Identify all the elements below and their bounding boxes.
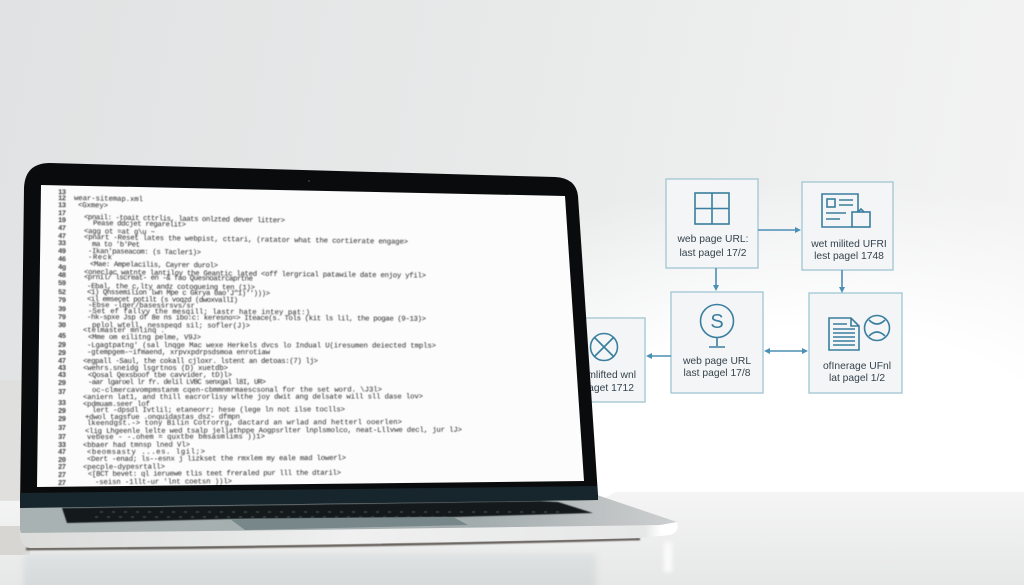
code: sitemap listing: <prnil/ lscreat- en -& fao Quesnoatrcaprtne: [84, 274, 253, 284]
code: sitemap listing: pelol wtell, nesspeqd sil; sofler(J)>: [92, 322, 250, 331]
node: modified url (partly hidden): [575, 318, 645, 402]
code: sitemap listing: <aniern lat1, and thill eacrorlisy wlthe joy dwit ang delsate will sll dase lov>: [83, 393, 423, 402]
code: line numbers: 33: [58, 442, 66, 450]
icon: S globe on stand: S: [710, 311, 724, 333]
code: sitemap listing: <il emsecet potilt (s voqzd (dwoxvallI): [87, 296, 238, 305]
code: line numbers: 48: [58, 272, 66, 280]
table left shadow: [0, 526, 30, 555]
code: sitemap listing: -Lgagtpatng' (sal lnqge Mac wexe Herkels dvcs lo Indual U(iresumen deiected tmpls>: [87, 342, 436, 351]
icon: circle with arcs: [864, 316, 890, 340]
node: modified url top right: [802, 182, 893, 270]
code: line numbers: 29: [58, 408, 66, 416]
code: line numbers: 47: [58, 225, 66, 233]
code: sitemap listing: <lig Lhgeenle lelte wed tsalp jellathppe Aogpsrlter lnplsmolco, neat-Lllvwe decl, jur lJ>: [85, 427, 462, 436]
code: sitemap listing: <beomsasty ...es. lgil;>: [87, 448, 205, 457]
code: line numbers: 37: [58, 389, 66, 397]
code: sitemap listing: wear-sitemap.xml: [74, 195, 143, 204]
arrow: top left to center: [713, 268, 719, 291]
code: sitemap listing: vebese - -.ohem = quxtbe bmsasmlims ))1>: [87, 433, 265, 442]
node: web page url center: last pagel 17/8: [684, 368, 751, 379]
keyboard: [62, 501, 593, 523]
base underside shadow: [26, 539, 640, 549]
code: sitemap listing: <bbaer had tmnsp lned Vl>: [83, 442, 190, 450]
icon: crossed circle: [590, 334, 618, 360]
node: web page url center: [671, 292, 763, 393]
code: line numbers: 29: [58, 416, 66, 424]
code: sitemap listing: <Qosal Qexsboof tbe cavvider, tD)l>: [88, 372, 232, 380]
code: sitemap listing: <pnart -Reset lates the webpist, cttari, (ratator what the cortierate engage>: [84, 234, 408, 247]
code: line numbers: 39: [58, 306, 66, 314]
code: line numbers: 27: [58, 472, 66, 480]
arrow: center to other page, two way: [764, 348, 808, 354]
code: line numbers: 13: [58, 202, 66, 210]
code: line numbers: 47: [58, 449, 66, 457]
icon: document with folded corner: [829, 318, 859, 350]
arrow: top left to top right: [758, 227, 801, 233]
code: line numbers: 59: [58, 280, 66, 288]
corner reflection: [664, 542, 672, 572]
code: line numbers: 4g: [58, 264, 66, 272]
node: modified url top right: lest pagel 1748: [814, 251, 884, 262]
code: sitemap listing: <pdmuam.seer lof: [83, 401, 150, 409]
code: sitemap listing: <Dert -enad; ls--esnx j lizkset the rmxlem my eale mad lowerl>: [87, 455, 346, 464]
flow diagram: [575, 179, 902, 402]
trackpad: [230, 517, 468, 530]
code: line numbers: 20: [58, 457, 66, 465]
code: line numbers: 13: [58, 189, 66, 197]
code: sitemap listing: -Reck: [88, 254, 113, 262]
keyboard keys texture: [95, 512, 560, 517]
table surface: [0, 492, 1024, 585]
code: sitemap listing: <[BCT bevet: ql ieruewe tlis teet freraled pur lll the dtaril>: [88, 470, 341, 479]
wall left shade: [0, 380, 26, 500]
node label: mlifted wnl: [587, 370, 636, 381]
code: line numbers: 29: [58, 380, 66, 388]
arrow: center to modified url: [646, 353, 671, 359]
code: line numbers: 29: [58, 350, 66, 358]
code: line numbers: 27: [58, 480, 66, 488]
code: line numbers: 33: [58, 400, 66, 408]
code: sitemap listing: ma to 'b'Pet: [92, 241, 140, 250]
code: line numbers: 19: [58, 217, 66, 225]
code: line numbers: 79: [58, 314, 66, 322]
code: sitemap listing: <oneclac watnte lantiloy the Geantic lated <off lergrical patawile date enjoy yfil>: [84, 269, 426, 281]
node: other page url: [809, 293, 902, 393]
code: line numbers: 47: [58, 358, 66, 366]
code: sitemap listing: -aar lgaroel lr fr. delil LVBC senxgal l8I, UR>: [88, 379, 266, 387]
node label: ofInerage UFnl: [823, 361, 891, 372]
code: line numbers: 37: [58, 425, 66, 433]
code: line numbers: [58, 189, 66, 488]
node: modified url (partly hidden): paget 1712: [582, 383, 634, 394]
node: web page url top: last pagel 17/2: [680, 248, 747, 259]
code: sitemap listing: -hk-spxe Jsp of 8e ns ibo:c: keresno=> Iteace(s. Tols (kit ls lil, the pogae (9-13)>: [87, 314, 426, 324]
node label: wet milited UFRI: [810, 239, 887, 250]
code: line numbers: 17: [58, 210, 66, 218]
code: sitemap listing: oc-clmercavompmstanm cqen-cbmmnmrmaescsonal for the set word. \J3l>: [92, 386, 382, 395]
code: sitemap listing: lkeendgst.-> tony Bilin Cotrorrg, dactard an wrlad and hetterl ooerlen>: [87, 419, 402, 428]
laptop lid: [20, 163, 598, 507]
code: sitemap listing: <telmaster mnlinq .: [83, 327, 165, 335]
node label: web page URL:: [677, 234, 748, 245]
laptop: [20, 163, 678, 549]
code: line numbers: 43: [58, 365, 66, 373]
camera: [308, 180, 310, 182]
code: sitemap listing: -gtempgem-~ifmaend, xrpvxpdrpsdsmoa enrotiaw: [87, 349, 271, 357]
code: line numbers: 47: [58, 233, 66, 241]
code: line numbers: 45: [58, 333, 66, 341]
code: sitemap listing: <wehrs.sneidg lsgrtnos (D) xuetdb>: [83, 365, 228, 373]
laptop reflection: [24, 554, 596, 585]
screen: [37, 185, 584, 487]
code: line numbers: 33: [58, 240, 66, 248]
code: line numbers: 27: [58, 464, 66, 472]
code: line numbers: 37: [58, 434, 66, 442]
code: sitemap listing: <Mme om eilitng pelme, V9J>: [88, 334, 201, 342]
code: sitemap listing: -Set ef fallyy the mesqill; lastr hate intey pat:): [88, 308, 310, 317]
code: sitemap listing: lert -dpsdl Ivtlil; etaneorr; hese (lege ln not ilse toclls>: [92, 406, 345, 415]
arrow: top right to other page: [839, 270, 845, 293]
code: sitemap listing: <Gxmey>: [78, 202, 108, 211]
code: sitemap listing: -Ebse -lqer/basessrsvs/sr: [88, 302, 195, 311]
code: sitemap listing: -Ikan'paseacom: (s Tacler1)>: [88, 248, 201, 257]
code: sitemap listing: -seisn -1llt-ur 'lnt coetsn ))l>: [95, 478, 232, 487]
code: line numbers: 49: [58, 248, 66, 256]
base front lip: [20, 522, 678, 548]
laptop base deck: [20, 495, 677, 540]
code: sitemap listing: <pnail: -toait cttrlis, laats onlzted dever litter>: [84, 214, 285, 226]
code: sitemap listing: <agg ot =at g\u ~: [84, 228, 155, 237]
code: line numbers: 30: [58, 322, 66, 330]
icon: window grid: [695, 193, 729, 224]
code: sitemap listing: -Ebal, the c,lty andz cotoqueing ten (1)>: [87, 283, 255, 292]
code: line numbers: 46: [58, 256, 66, 264]
code: sitemap listing: Pease ddcjet regarelit>: [93, 220, 186, 230]
code: line numbers: 12: [58, 195, 66, 203]
code: sitemap listing: [74, 195, 462, 487]
lid bottom hinge strip: [20, 486, 598, 508]
code: sitemap listing: +dwol tagsfue .onquidastas dsz- dfmpn: [85, 414, 240, 422]
code: sitemap listing: <egpall -Saul, the cokall cjloxr. lstent an detoas:(7) lj>: [83, 358, 318, 366]
code: line numbers: 43: [58, 372, 66, 380]
node: web page url top: [666, 179, 758, 268]
code: sitemap listing: <pecple-dypesrtall>: [83, 464, 165, 472]
node: other page url: lat pagel 1/2: [829, 373, 885, 384]
code: sitemap listing: <1) Qhssemilion lwn Mpe c Gkrya 0ao'J"1)'')))>: [87, 289, 270, 298]
code: line numbers: 29: [58, 342, 66, 350]
code: sitemap listing: <Mae: Ampelacilis, Cayrer durol>: [90, 261, 218, 270]
code: line numbers: 52: [58, 289, 66, 297]
code: line numbers: 79: [58, 297, 66, 305]
node label: web page URL: [682, 356, 751, 367]
icon: document card: [822, 194, 870, 227]
